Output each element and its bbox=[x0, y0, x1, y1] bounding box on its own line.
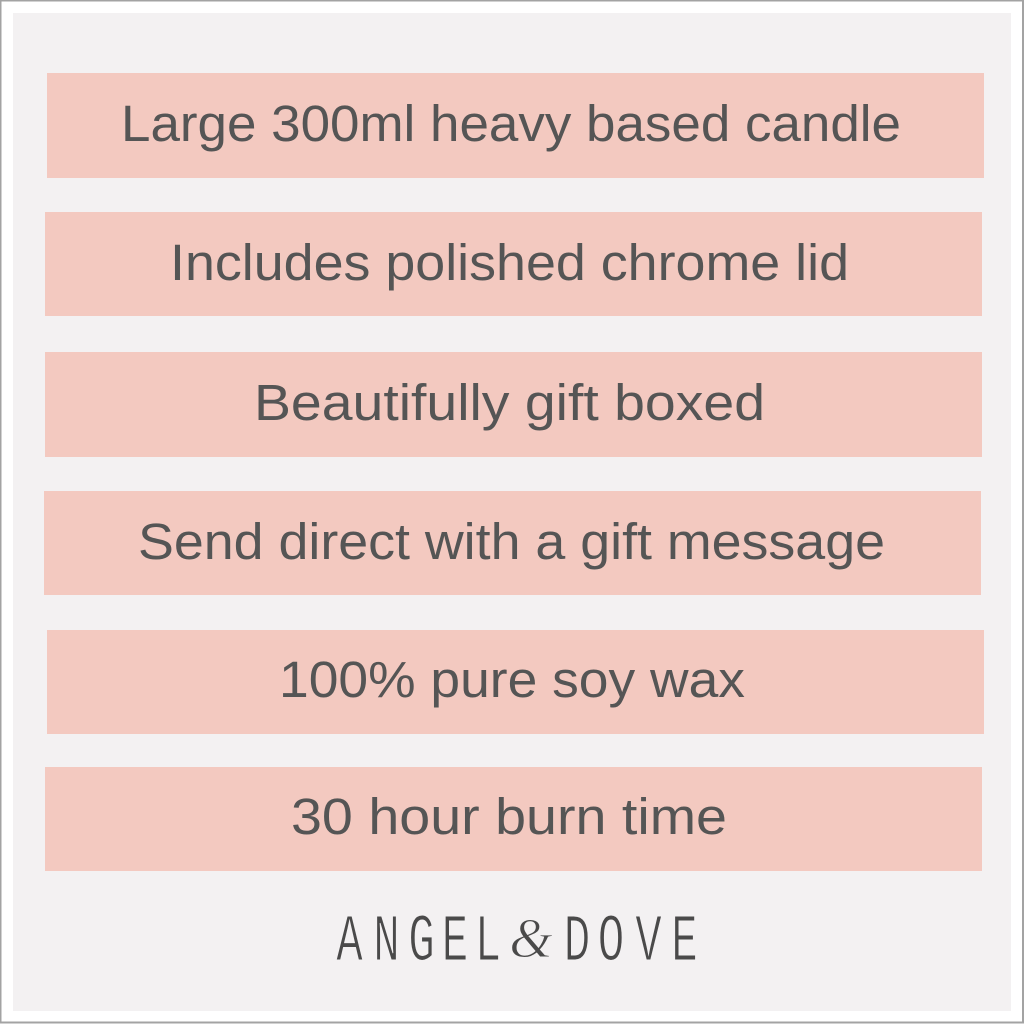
feature bar: candle size bbox=[47, 73, 984, 178]
feature bar: chrome lid bbox=[45, 212, 982, 316]
feature bar: candle size: Large 300ml heavy based candle bbox=[121, 95, 901, 152]
logo: Angel & Dove: ANGEL bbox=[336, 906, 501, 981]
feature bar: burn time: 30 hour burn time bbox=[291, 788, 727, 845]
logo: Angel & Dove bbox=[336, 906, 698, 981]
feature bar: soy wax bbox=[47, 630, 984, 734]
feature bar: burn time bbox=[45, 767, 982, 871]
feature bar: gift message: Send direct with a gift message bbox=[138, 513, 885, 570]
logo: Angel & Dove: DOVE bbox=[564, 906, 698, 981]
logo: Angel & Dove: & bbox=[509, 908, 553, 970]
feature bar: soy wax: 100% pure soy wax bbox=[279, 651, 745, 708]
feature bar: gift box: Beautifully gift boxed bbox=[254, 374, 765, 431]
feature bar: gift message bbox=[44, 491, 981, 595]
feature bar: chrome lid: Includes polished chrome lid bbox=[170, 234, 849, 291]
feature bar: gift box bbox=[45, 352, 982, 457]
